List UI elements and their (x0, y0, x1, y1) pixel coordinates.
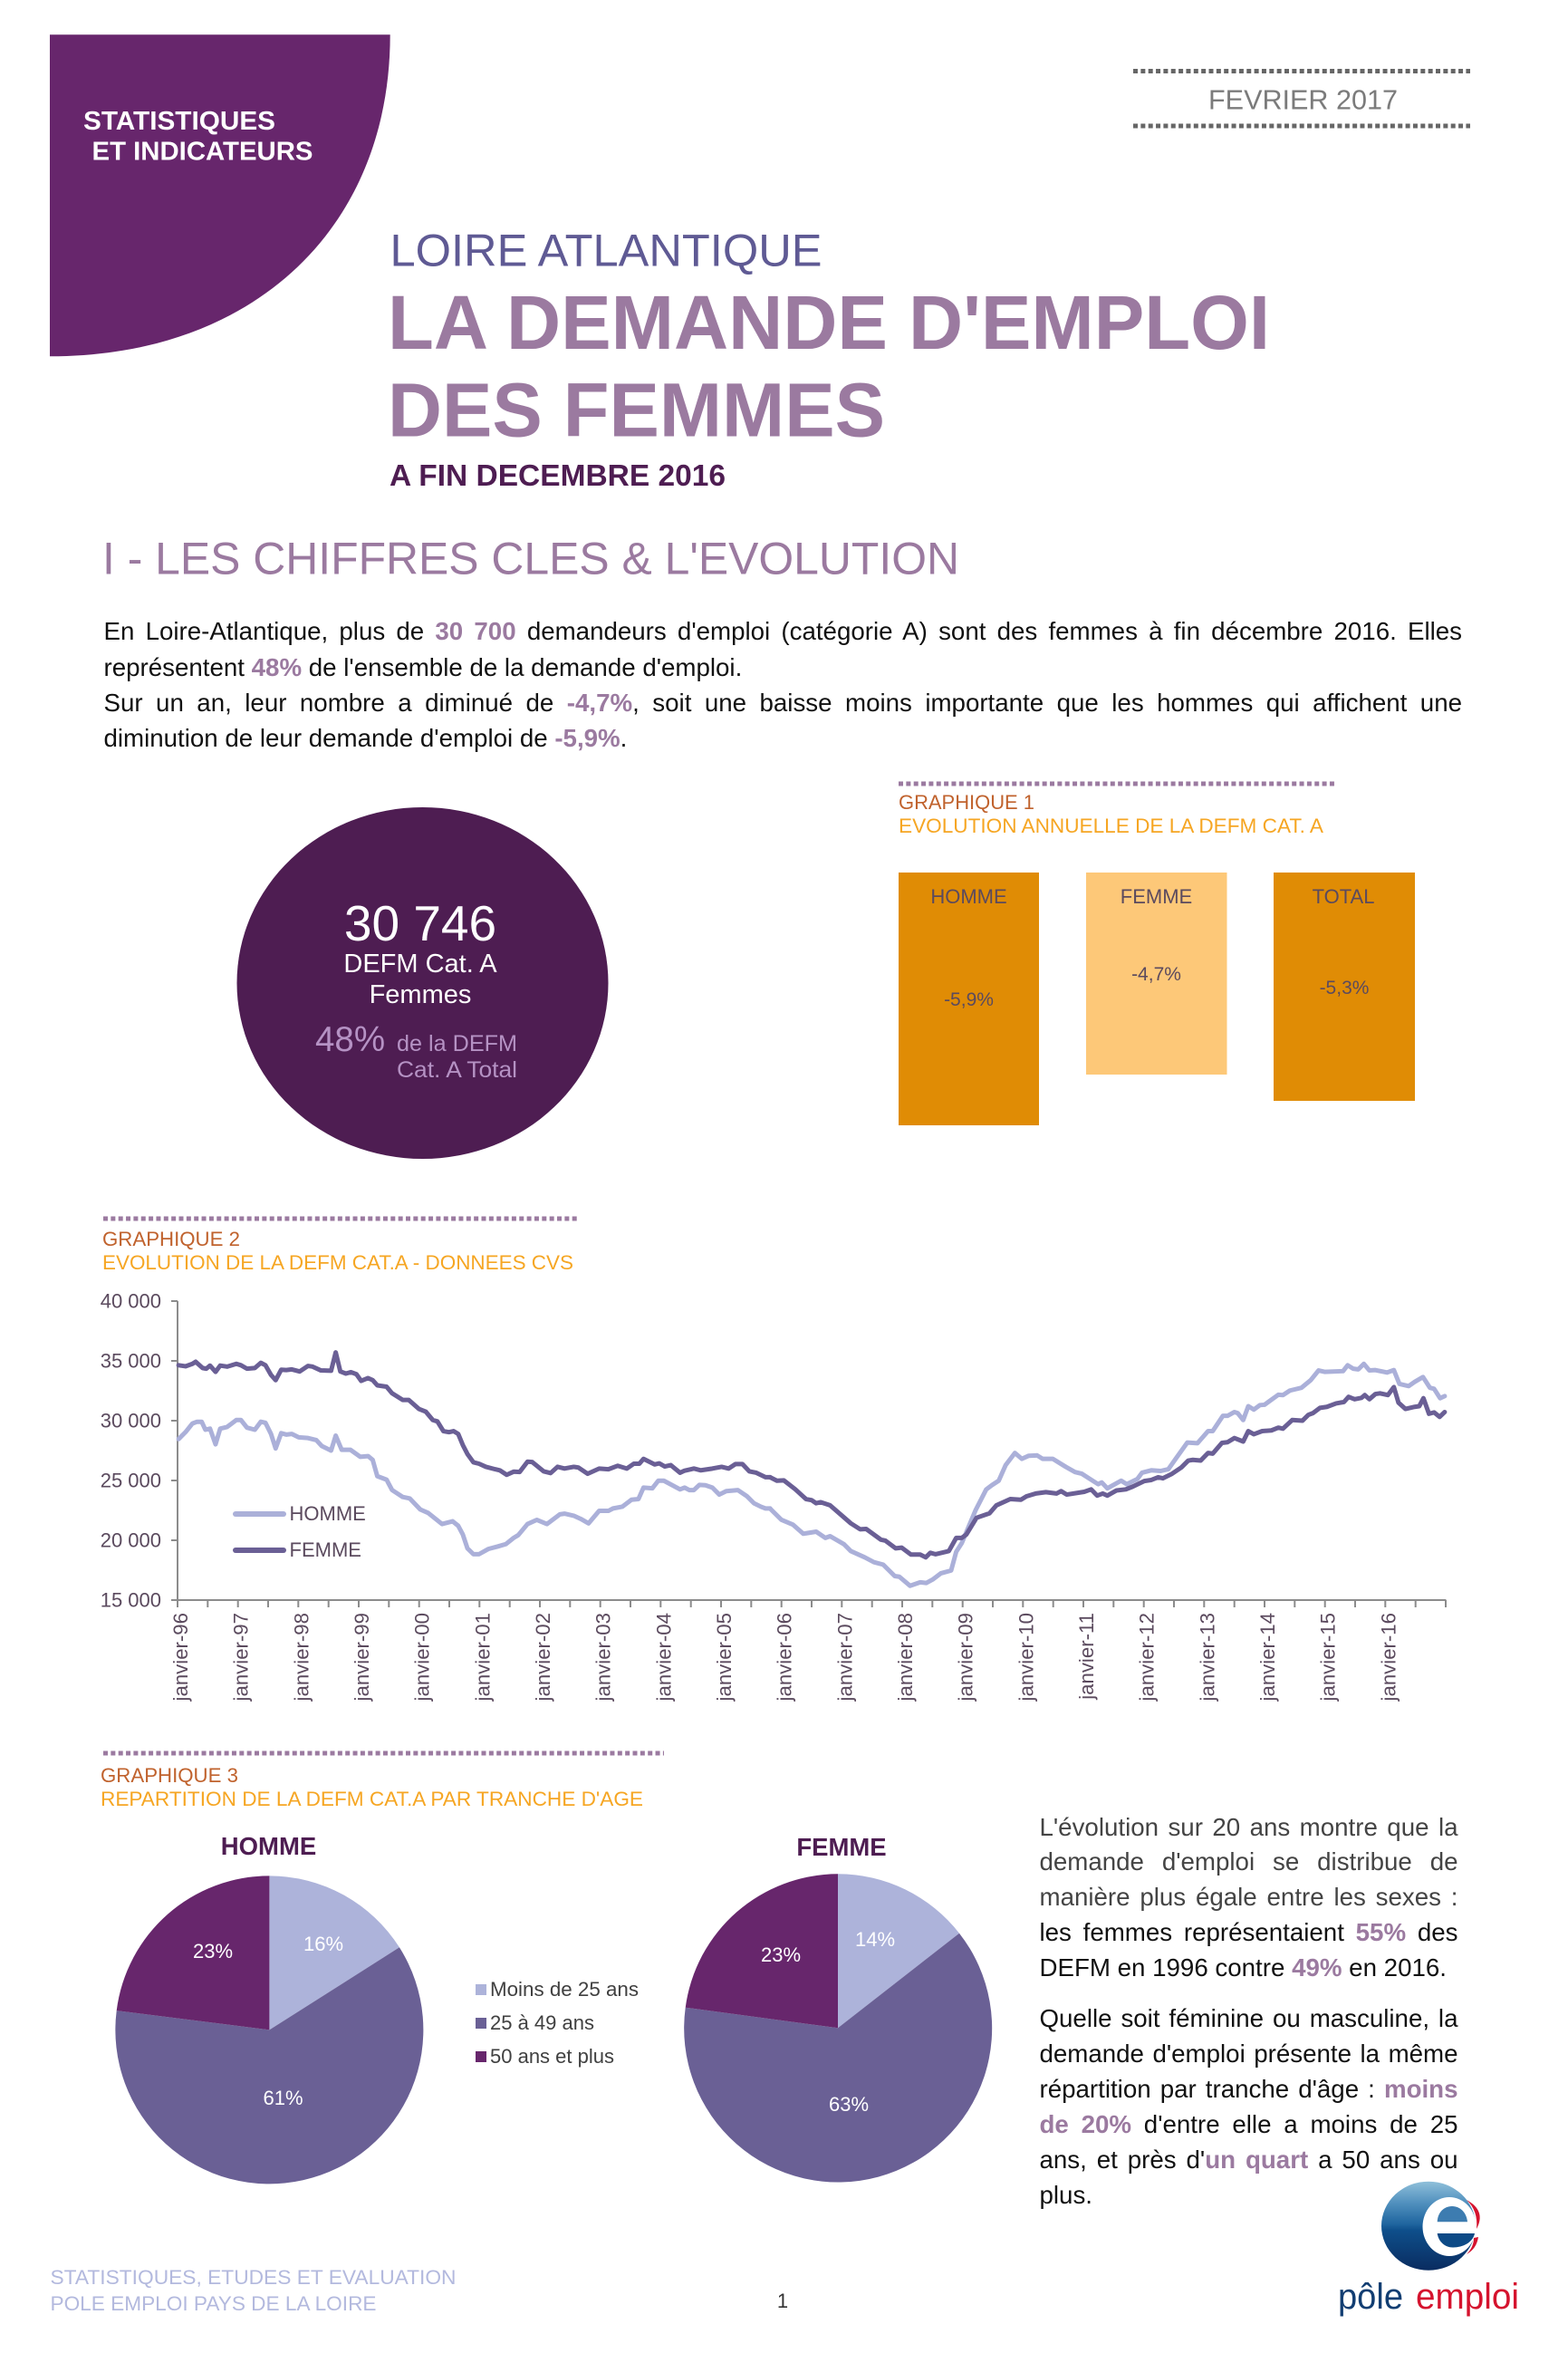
footer: source (51, 2266, 457, 2315)
chart 1: annual evolution bars: EVOLUTION ANNUELLE DE LA DEFM CAT. A (899, 815, 1323, 837)
intro paragraph: En Loire-Atlantique, plus de 30 700 demandeurs d'emploi (catégorie A) sont des femmes à fin décembre 2016. Elles (103, 617, 1462, 645)
axes (171, 1301, 1446, 1607)
banner: statistiques et indicateurs (50, 34, 390, 356)
chart 3: heading (101, 1753, 664, 1810)
pie: homme: 16% (303, 1933, 343, 1955)
chart 3: heading: GRAPHIQUE 3 (101, 1764, 238, 1787)
commentary paragraph 1: L'évolution sur 20 ans montre que la (1040, 1812, 1458, 1841)
x axis labels: janvier-09 (955, 1613, 977, 1702)
title block: A FIN DECEMBRE 2016 (390, 458, 726, 492)
commentary paragraph 2: ans, et près d'un quart a 50 ans ou (1040, 2146, 1458, 2174)
chart 1: annual evolution bars: GRAPHIQUE 1 (899, 791, 1034, 814)
x axis labels: janvier-07 (833, 1613, 856, 1702)
pie: femme: 63% (829, 2093, 869, 2116)
commentary paragraph 2: répartition par tranche d'âge : moins (1040, 2075, 1458, 2103)
key figure circle: DEFM Cat. A (343, 950, 497, 979)
x axis labels: janvier-05 (713, 1613, 736, 1702)
bar: homme: HOMME (930, 885, 1007, 908)
page number: 1 (777, 2290, 788, 2312)
x axis labels: janvier-12 (1136, 1613, 1159, 1702)
series: femme (178, 1353, 1445, 1557)
bar: total: TOTAL (1313, 885, 1374, 908)
y axis labels (101, 1290, 161, 1611)
bar: homme: -5,9% (944, 989, 994, 1010)
x axis labels: janvier-14 (1256, 1613, 1279, 1702)
y axis labels: 25 000 (101, 1470, 161, 1491)
x axis labels: janvier-11 (1075, 1613, 1098, 1701)
x axis labels: janvier-08 (894, 1613, 917, 1702)
pie: femme: 23% (761, 1943, 801, 1966)
commentary paragraph 1: les femmes représentaient 55% des (1040, 1918, 1457, 1946)
logo: pole emploi: pôle (1338, 2277, 1403, 2317)
pie legend: Moins de 25 ans (490, 1978, 639, 2001)
banner: statistiques et indicateurs: ET INDICATEURS (92, 137, 313, 166)
logo: pole emploi: emploi (1416, 2277, 1519, 2317)
footer: source: STATISTIQUES, ETUDES ET EVALUATION (51, 2266, 457, 2289)
pie: homme: HOMME (221, 1832, 316, 1860)
bar: total (1274, 873, 1415, 1101)
x axis labels: janvier-03 (592, 1613, 615, 1702)
x axis labels: janvier-97 (230, 1613, 253, 1702)
key figure circle: Femmes (370, 980, 471, 1009)
key figure circle: 30 746 (344, 895, 496, 951)
x axis labels: janvier-13 (1196, 1613, 1218, 1702)
bar: total: -5,3% (1320, 978, 1369, 998)
intro paragraph: diminution de leur demande d'emploi de -5,9%. (103, 724, 627, 752)
key figure circle (237, 807, 609, 1159)
banner: statistiques et indicateurs: STATISTIQUES (83, 107, 275, 136)
chart 2: line chart of DEFM evolution: GRAPHIQUE 2 (102, 1228, 240, 1250)
logo: pole emploi (1338, 2182, 1519, 2317)
pie legend: 25 à 49 ans (490, 2011, 594, 2034)
x axis labels: janvier-98 (290, 1613, 313, 1702)
legend: HOMME (290, 1502, 366, 1525)
y axis labels: 35 000 (101, 1350, 161, 1372)
pie: homme (115, 1832, 423, 2184)
x axis labels (169, 1613, 1400, 1702)
key figure circle: 48% (315, 1020, 385, 1059)
x axis labels: janvier-04 (652, 1613, 675, 1702)
commentary paragraph 2: demande d'emploi présente la même (1040, 2040, 1458, 2068)
intro paragraph: Sur un an, leur nombre a diminué de -4,7%, soit une baisse moins importante que les hommes qui affichent une (103, 689, 1462, 717)
chart 1: annual evolution bars (899, 784, 1415, 1125)
intro paragraph: représentent 48% de l'ensemble de la demande d'emploi. (103, 653, 742, 681)
legend (236, 1502, 366, 1561)
title block: DES FEMMES (388, 368, 885, 453)
series: homme (178, 1364, 1445, 1586)
pie: femme (684, 1833, 992, 2183)
key figure circle: Cat. A Total (397, 1057, 517, 1083)
chart 2: line chart of DEFM evolution (101, 1219, 1446, 1702)
pie: homme: 61% (263, 2087, 303, 2109)
commentary paragraph 2: plus. (1040, 2181, 1092, 2209)
section heading: I - LES CHIFFRES CLES & L'EVOLUTION (102, 533, 959, 583)
y axis labels: 30 000 (101, 1410, 161, 1432)
key figure circle: de la DEFM (397, 1031, 517, 1056)
commentary paragraph 1: manière plus égale entre les sexes : (1040, 1883, 1458, 1911)
bar: femme (1086, 873, 1227, 1075)
y axis labels: 40 000 (101, 1290, 161, 1312)
x axis labels: janvier-06 (774, 1613, 796, 1702)
pie legend (476, 1978, 639, 2068)
x axis labels: janvier-16 (1377, 1613, 1400, 1702)
date block: FEVRIER 2017 (1208, 85, 1398, 116)
pie legend: 50 ans et plus (490, 2045, 614, 2068)
y axis labels: 15 000 (101, 1589, 161, 1611)
intro paragraph (103, 617, 1462, 752)
bar: homme (899, 873, 1039, 1125)
title block (388, 225, 1270, 492)
x axis labels: janvier-02 (532, 1613, 554, 1702)
commentary paragraph 1 (1040, 1812, 1458, 1982)
commentary paragraph 2 (1040, 2004, 1458, 2209)
footer: source: POLE EMPLOI PAYS DE LA LOIRE (51, 2292, 377, 2315)
title block: LOIRE ATLANTIQUE (390, 225, 822, 275)
commentary paragraph 1: demande d'emploi se distribue de (1040, 1847, 1458, 1876)
legend: FEMME (290, 1538, 361, 1561)
bar: femme: FEMME (1121, 885, 1192, 908)
x axis labels: janvier-15 (1317, 1613, 1340, 1702)
x axis labels: janvier-01 (471, 1613, 494, 1702)
y axis labels: 20 000 (101, 1529, 161, 1551)
bar: femme: -4,7% (1131, 964, 1181, 985)
chart 2: line chart of DEFM evolution: EVOLUTION DE LA DEFM CAT.A - DONNEES CVS (102, 1251, 573, 1274)
chart 3: heading: REPARTITION DE LA DEFM CAT.A PAR TRANCHE D'AGE (101, 1788, 643, 1810)
commentary paragraph 2: Quelle soit féminine ou masculine, la (1040, 2004, 1458, 2032)
x axis labels: janvier-99 (351, 1613, 373, 1702)
commentary paragraph 2: de 20% d'entre elle a moins de 25 (1040, 2110, 1458, 2138)
pie: femme: 14% (855, 1928, 895, 1951)
pie: homme: 23% (193, 1940, 233, 1962)
x axis labels: janvier-10 (1015, 1613, 1037, 1702)
x axis labels: janvier-96 (169, 1613, 192, 1702)
pie: femme: FEMME (796, 1833, 887, 1861)
commentary paragraph 1: DEFM en 1996 contre 49% en 2016. (1040, 1953, 1447, 1982)
title block: LA DEMANDE D'EMPLOI (388, 280, 1270, 365)
x axis labels: janvier-00 (411, 1613, 434, 1702)
